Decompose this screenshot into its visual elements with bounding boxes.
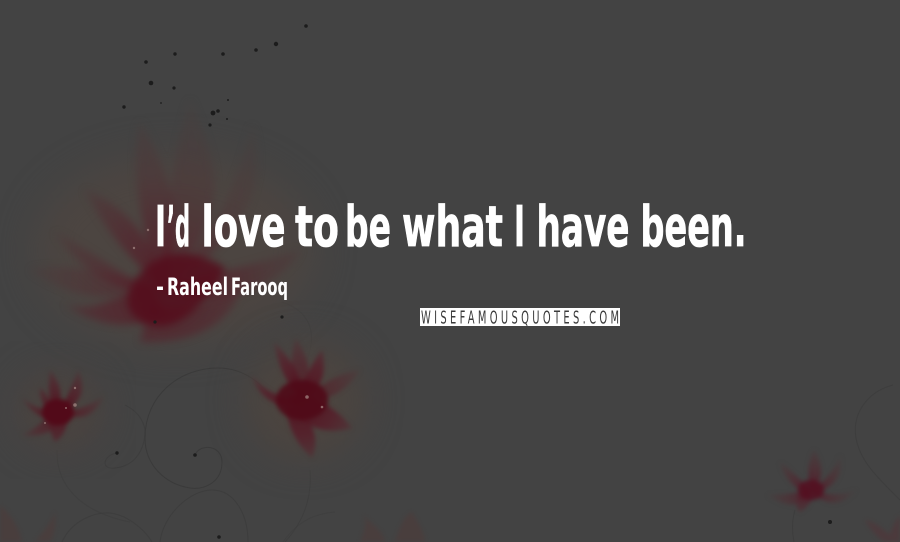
quote text: have <box>536 195 630 260</box>
author attribution: Farooq <box>231 273 288 301</box>
spiral line decorations <box>57 302 900 542</box>
watermark badge: WISEFAMOUSQUOTES.COM <box>421 309 619 328</box>
quote text <box>155 195 746 260</box>
quote text: what <box>402 195 503 260</box>
flower: centre <box>247 338 363 458</box>
author attribution: Raheel <box>167 273 228 301</box>
flower: small right <box>768 450 856 512</box>
flower: large left <box>30 100 315 345</box>
flower highlights <box>44 229 323 424</box>
quote text: I <box>514 195 525 260</box>
flower: small left <box>18 370 104 448</box>
quote text: love <box>202 195 286 260</box>
flower: partial bottom centre and left <box>0 505 425 542</box>
flower: partial bottom right <box>865 515 900 542</box>
quote text: I <box>155 195 166 260</box>
ink speckles <box>115 24 832 539</box>
quote text: ’d <box>167 195 190 260</box>
quote text: be <box>345 195 391 260</box>
quote text: been. <box>640 195 746 260</box>
quote text: to <box>295 195 339 260</box>
author attribution: - <box>156 273 164 301</box>
